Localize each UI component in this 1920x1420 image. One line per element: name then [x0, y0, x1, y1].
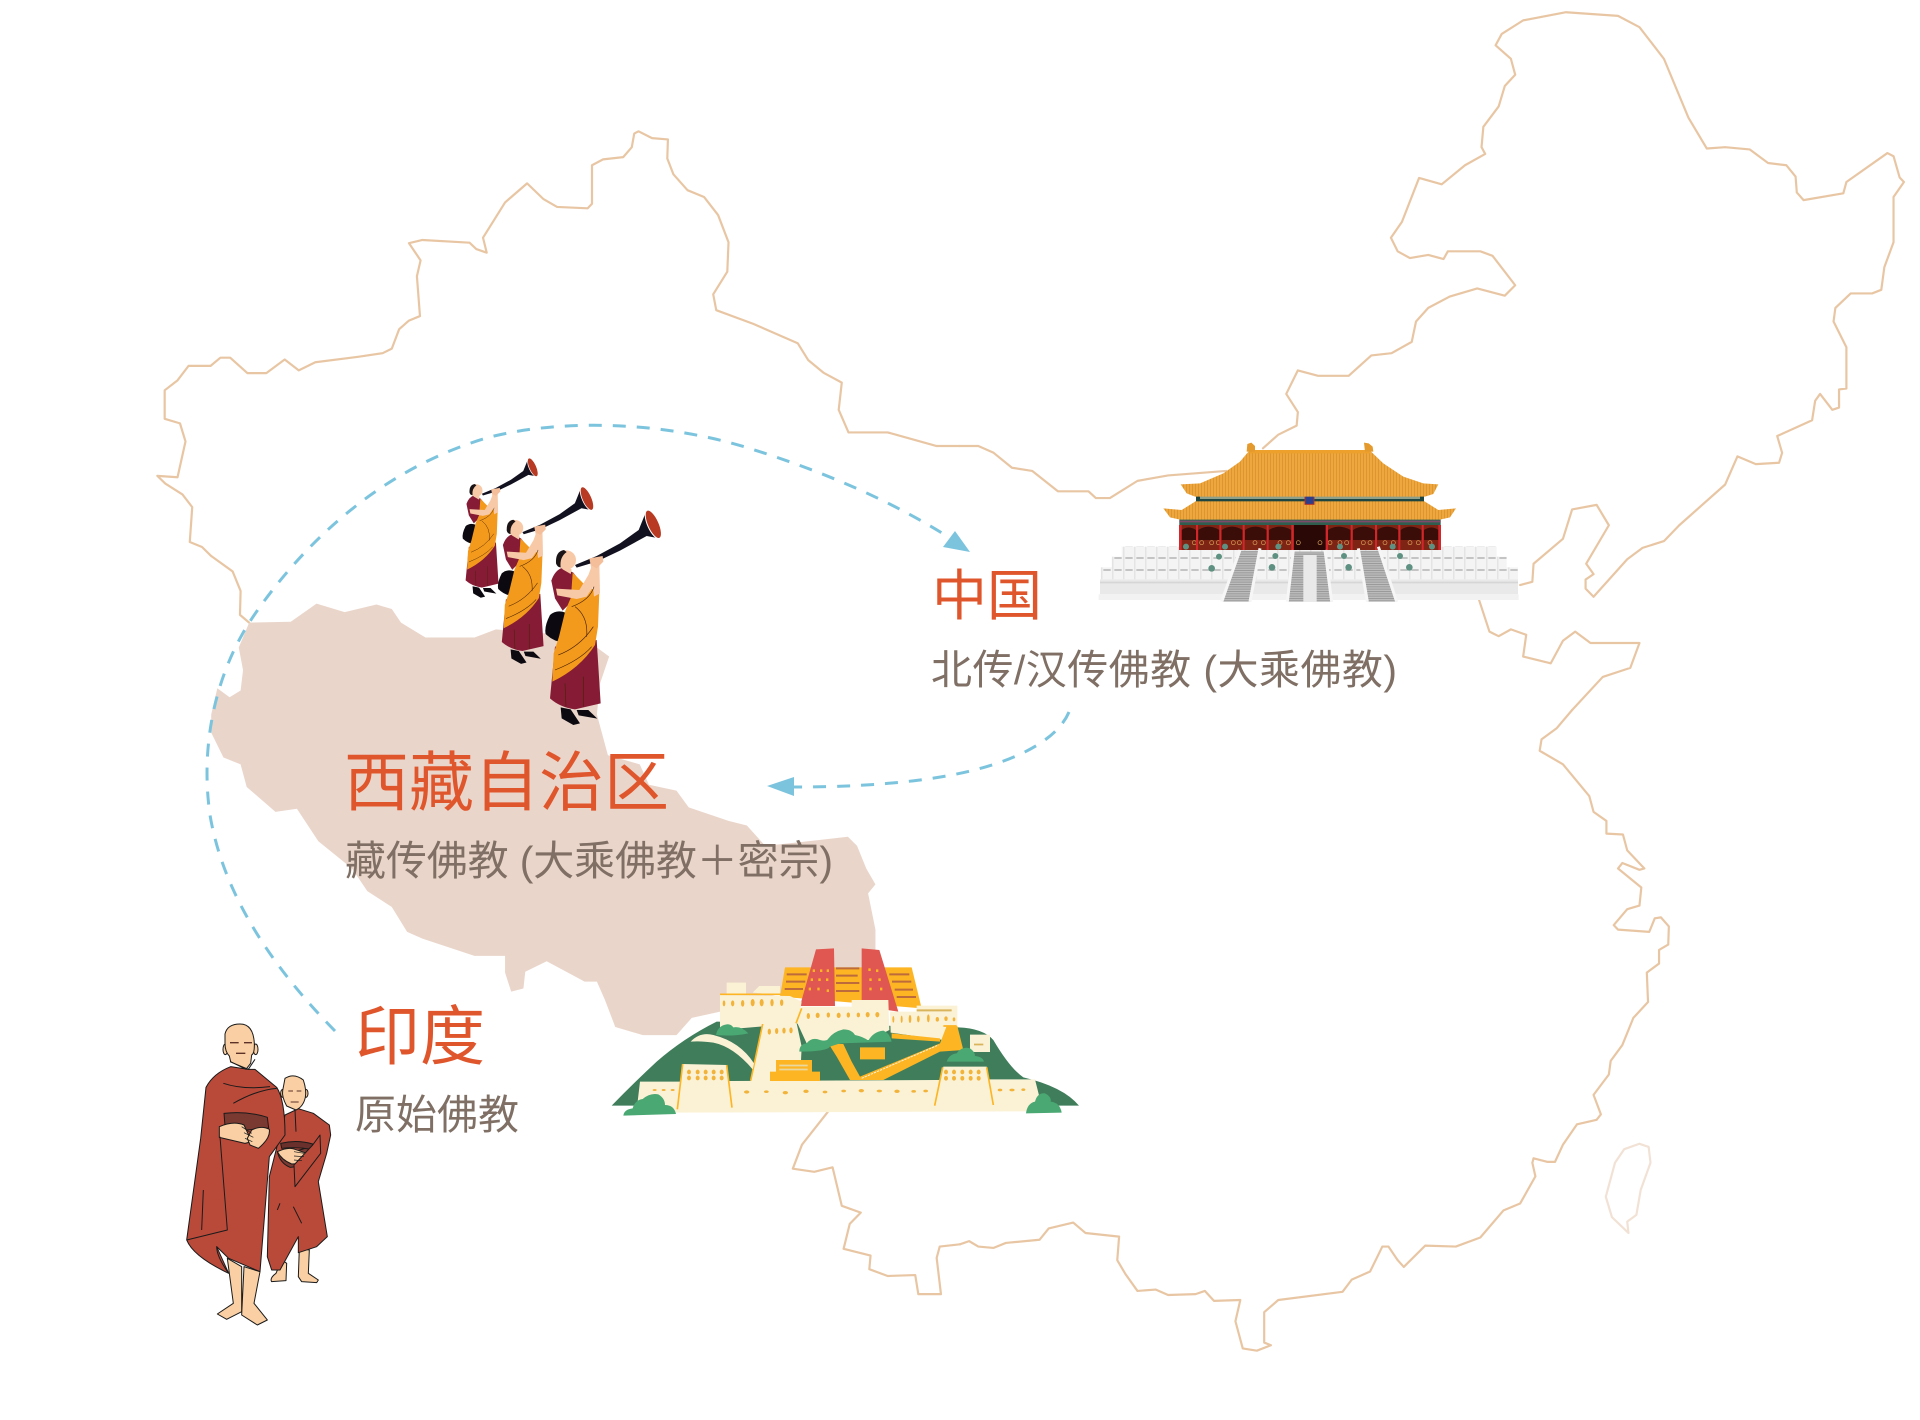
- tibet label: [344, 746, 833, 884]
- small monk: [267, 1076, 331, 1283]
- monk back: [463, 457, 540, 598]
- icon: tibetan monks with horns: [463, 457, 665, 725]
- subtitle: india: 原始佛教: [355, 1092, 519, 1138]
- route: china to tibet arc: [767, 712, 1069, 796]
- china label: [931, 565, 1397, 693]
- india label: [355, 1000, 519, 1138]
- monk front: [545, 508, 665, 725]
- heading: china: 中国: [932, 565, 1042, 627]
- icon: potala palace: [612, 948, 1079, 1116]
- arrowhead: [943, 531, 970, 552]
- arrowhead: [767, 777, 794, 796]
- monk middle: [498, 485, 596, 664]
- subtitle: tibet: 藏传佛教 (大乘佛教＋密宗): [345, 838, 833, 884]
- icon: indian monks: [187, 1024, 331, 1325]
- heading: tibet: 西藏自治区: [344, 746, 669, 819]
- large monk: [187, 1024, 285, 1325]
- heading: india: 印度: [355, 1000, 485, 1073]
- tibet region: [211, 604, 875, 1035]
- route: india to china arc: [207, 425, 970, 1031]
- icon: forbidden city hall: [1099, 443, 1519, 602]
- subtitle: china: 北传/汉传佛教 (大乘佛教): [931, 647, 1397, 693]
